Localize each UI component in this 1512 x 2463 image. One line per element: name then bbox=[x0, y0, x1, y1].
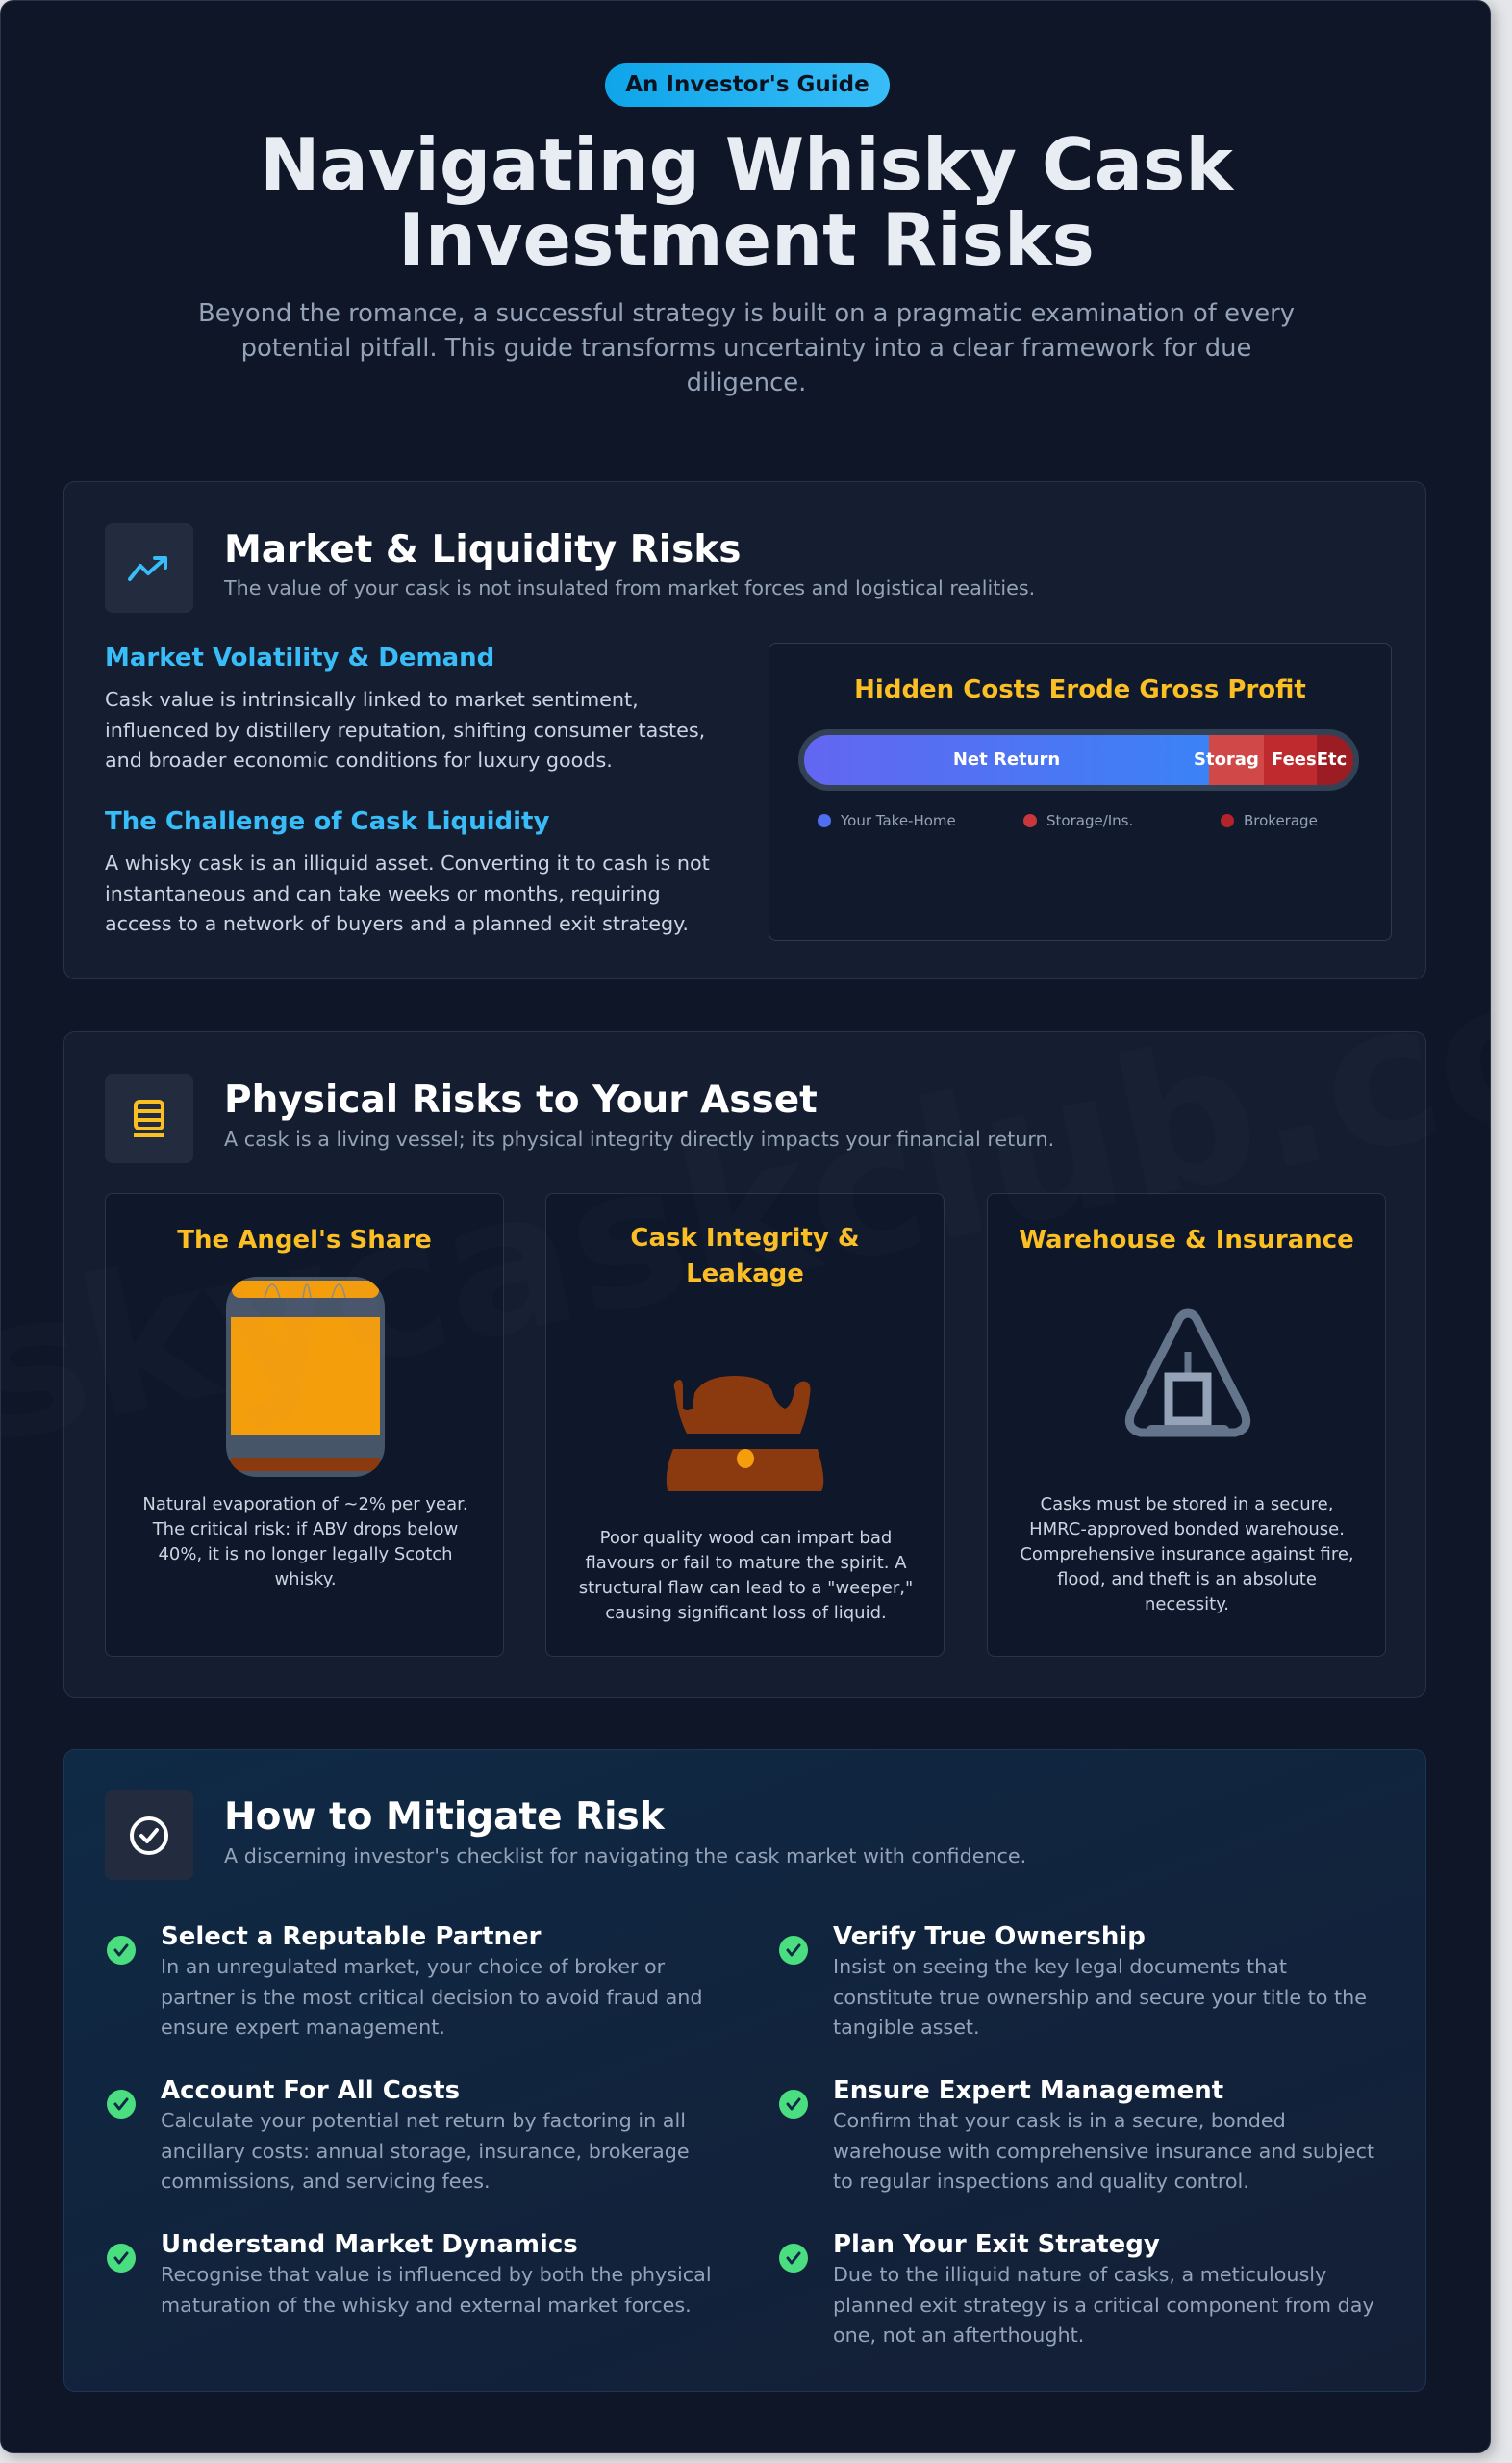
item 4: Ensure Expert Management bbox=[833, 2076, 1223, 2105]
panel: mitigate: Insist on seeing the key legal documents that constitute true ownership and secure your title to the tangible asset. bbox=[833, 1955, 1367, 2039]
item 3 bbox=[107, 2076, 690, 2193]
icon: cask stack bbox=[105, 1074, 193, 1163]
card: cask integrity bbox=[545, 1193, 945, 1657]
card: cask integrity: Cask Integrity & bbox=[630, 1224, 860, 1253]
stacked bar: Storag bbox=[1194, 749, 1259, 770]
heading: How to Mitigate Risk bbox=[224, 1795, 665, 1839]
legend: Storage/Ins. bbox=[1046, 812, 1133, 829]
item 6 bbox=[779, 2230, 1374, 2347]
item 3: Account For All Costs bbox=[161, 2076, 460, 2105]
panel: mitigate: Due to the illiquid nature of casks, a meticulously planned exit strategy is a critical component from day one, not an afterthought. bbox=[833, 2263, 1374, 2347]
text: volatility: Cask value is intrinsically linked to market sentiment, influenced by distillery reputation, shifting consumer tastes, and broader economic conditions for luxury goods. bbox=[105, 688, 705, 772]
icon: leaking cask bbox=[666, 1376, 823, 1491]
subheading: The value of your cask is not insulated from market forces and logistical realities. bbox=[224, 576, 1035, 599]
subheading: A cask is a living vessel; its physical integrity directly impacts your financial return. bbox=[224, 1128, 1054, 1151]
subheading: A discerning investor's checklist for navigating the cask market with confidence. bbox=[224, 1844, 1026, 1867]
panel: mitigate: In an unregulated market, your choice of broker or partner is the most critical decision to avoid fraud and ensure expert management. bbox=[161, 1955, 703, 2039]
panel: market & liquidity bbox=[63, 481, 1426, 979]
card: cask integrity: Poor quality wood can impart bad flavours or fail to mature the spirit. A structural flaw can lead to a "weeper," causing significant loss of liquid. bbox=[579, 1528, 913, 1623]
stacked bar: Net Return bbox=[953, 749, 1060, 770]
badge: An Investor's Guide bbox=[625, 72, 869, 97]
panel: mitigate: Confirm that your cask is in a secure, bonded warehouse with comprehensive insurance and subject to regular inspections and quality control. bbox=[833, 2109, 1374, 2193]
chart title: Hidden Costs Erode Gross Profit bbox=[854, 675, 1306, 704]
item 1 bbox=[107, 1922, 703, 2039]
panel: mitigate bbox=[63, 1749, 1426, 2392]
title: Investment Risks bbox=[398, 198, 1095, 282]
legend: Your Take-Home bbox=[841, 812, 956, 829]
panel: physical risks bbox=[63, 1031, 1426, 1698]
block: volatility: Market Volatility & Demand bbox=[105, 644, 494, 673]
title: Navigating Whisky Cask bbox=[260, 123, 1233, 207]
title bbox=[260, 123, 1235, 282]
block: liquidity: The Challenge of Cask Liquidity bbox=[105, 807, 549, 836]
icon: warehouse bbox=[1125, 1308, 1250, 1437]
panel: mitigate: Recognise that value is influenced by both the physical maturation of the whisky and external market forces. bbox=[161, 2263, 712, 2317]
item 5: Understand Market Dynamics bbox=[161, 2230, 578, 2259]
subtitle: Beyond the romance, a successful strategy is built on a pragmatic examination of every potential pitfall. This guide transforms uncertainty into a clear framework for due diligence. bbox=[198, 299, 1295, 397]
item 5 bbox=[107, 2230, 712, 2317]
text: liquidity: A whisky cask is an illiquid asset. Converting it to cash is not instantaneous and can take weeks or months, requiring access to a network of buyers and a planned exit strategy. bbox=[105, 851, 710, 935]
card: angel's share bbox=[105, 1193, 504, 1657]
item 1: Select a Reputable Partner bbox=[161, 1922, 541, 1951]
card: angel's share: Natural evaporation of ~2% per year. The critical risk: if ABV drops below 40%, it is no longer legally Scotch whisky. bbox=[142, 1494, 468, 1589]
card: warehouse: Warehouse & Insurance bbox=[1019, 1226, 1354, 1255]
icon: barrel bbox=[226, 1277, 385, 1477]
card: warehouse: Casks must be stored in a secure, HMRC-approved bonded warehouse. Comprehensive insurance against fire, flood, and theft is an absolute necessity. bbox=[1020, 1494, 1354, 1614]
chart: hidden costs bbox=[769, 643, 1392, 941]
badge bbox=[605, 63, 890, 107]
legend bbox=[818, 812, 1318, 829]
legend: Brokerage bbox=[1244, 812, 1318, 829]
panel: mitigate: Calculate your potential net return by factoring in all ancillary costs: annual storage, insurance, brokerage commissions, and servicing fees. bbox=[161, 2109, 690, 2193]
card: angel's share: The Angel's Share bbox=[177, 1226, 432, 1255]
heading: Market & Liquidity Risks bbox=[224, 528, 741, 571]
icon: trend bbox=[105, 523, 193, 613]
item 2 bbox=[779, 1922, 1367, 2039]
card: cask integrity: Leakage bbox=[686, 1259, 804, 1288]
stacked bar: FeesEtc bbox=[1272, 749, 1347, 770]
item 4 bbox=[779, 2076, 1374, 2193]
icon: check circle bbox=[105, 1790, 193, 1880]
heading: Physical Risks to Your Asset bbox=[224, 1079, 818, 1122]
item 2: Verify True Ownership bbox=[833, 1922, 1146, 1951]
stacked bar bbox=[798, 729, 1359, 791]
item 6: Plan Your Exit Strategy bbox=[833, 2230, 1160, 2259]
card: warehouse bbox=[987, 1193, 1386, 1657]
